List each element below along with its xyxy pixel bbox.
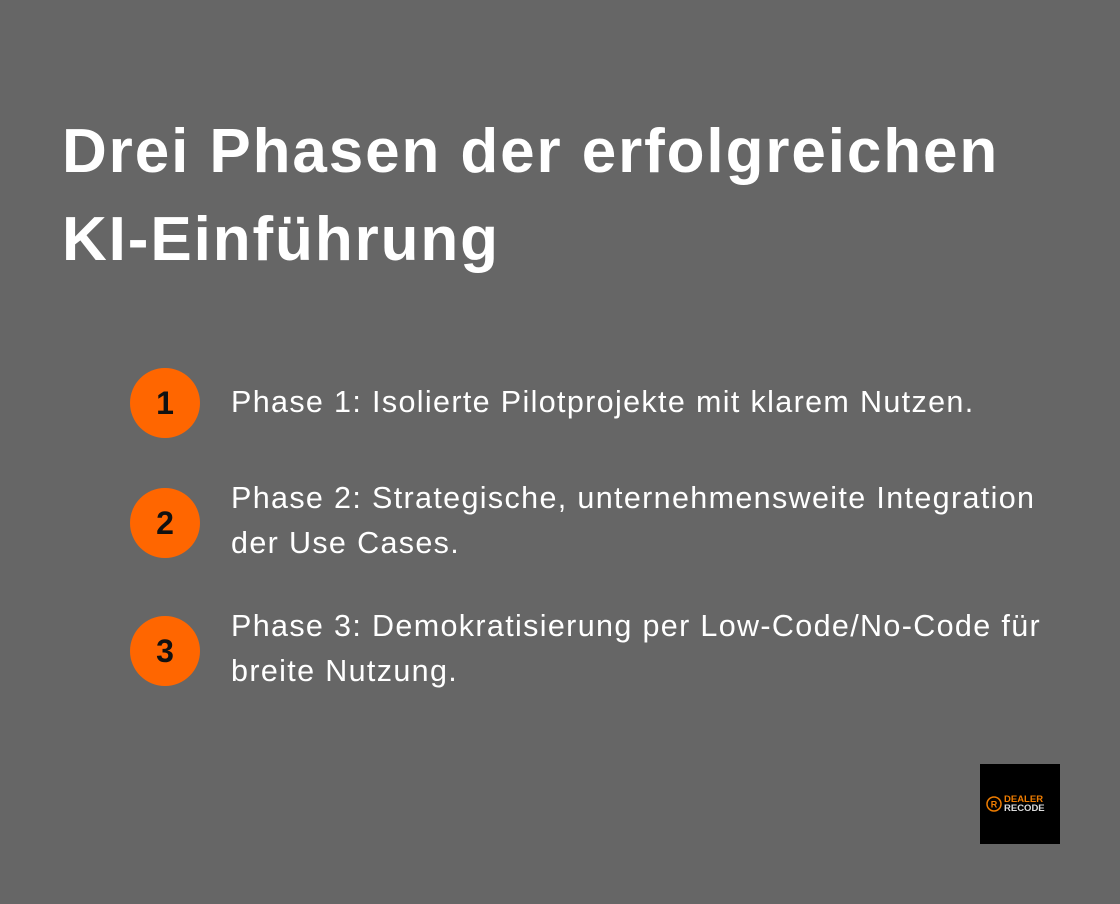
icon: number 2: 2 — [156, 505, 174, 541]
icon: number 3: 3 — [156, 633, 174, 669]
logo: R — [991, 800, 998, 810]
icon: number 3 — [130, 616, 200, 686]
logo: RECODE — [1004, 803, 1045, 814]
text 3: Phase 3: Demokratisierung per Low-Code/No-Code für — [231, 609, 1041, 643]
item 2 — [130, 481, 1035, 560]
title: Drei Phasen der erfolgreichen — [62, 117, 999, 186]
logo: DEALER — [1004, 794, 1043, 805]
text 2: Phase 2: Strategische, unternehmensweite Integration — [231, 481, 1035, 515]
text 3 — [231, 609, 1041, 688]
text 3: breite Nutzung. — [231, 654, 458, 688]
text 2: der Use Cases. — [231, 526, 460, 560]
logo — [980, 764, 1060, 844]
icon: number 2 — [130, 488, 200, 558]
item 3 — [130, 609, 1041, 688]
text 1: Phase 1: Isolierte Pilotprojekte mit klarem Nutzen. — [231, 385, 975, 419]
icon: number 1: 1 — [156, 385, 174, 421]
title: KI-Einführung — [62, 205, 500, 274]
text 2 — [231, 481, 1035, 560]
title — [62, 117, 999, 274]
icon: number 1 — [130, 368, 200, 438]
item 1 — [130, 368, 975, 438]
